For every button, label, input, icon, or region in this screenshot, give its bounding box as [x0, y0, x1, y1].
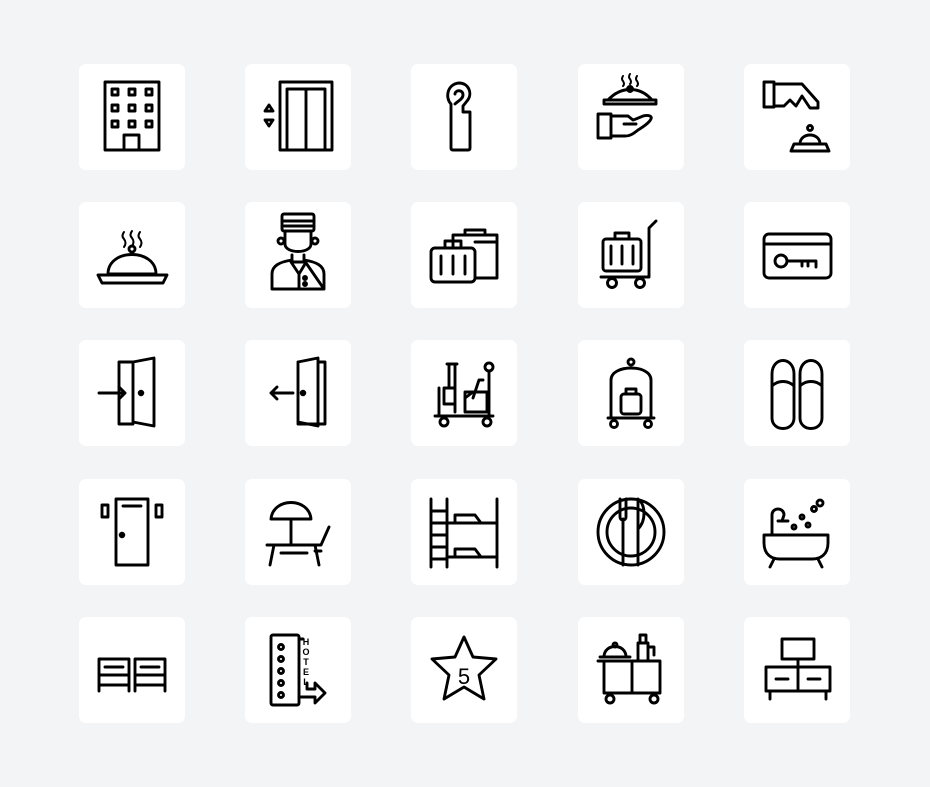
hotel sign text: T [303, 657, 309, 667]
hotel sign text: H [303, 637, 309, 647]
icon tile: hotel room door [79, 479, 185, 585]
icon tile: key card [744, 202, 850, 308]
icon tile: check-out door [245, 340, 351, 446]
icon tile: bellboy [245, 202, 351, 308]
icon tile: luggage [411, 202, 517, 308]
icon tile: elevator [245, 64, 351, 170]
icon tile: luggage trolley [578, 202, 684, 308]
icon tile: service trolley [578, 617, 684, 723]
icon tile: cleaning cart [411, 340, 517, 446]
icon tile: hotel building [79, 64, 185, 170]
icon tile: plate fork knife [578, 479, 684, 585]
icon tile: hotel sign [245, 617, 351, 723]
hotel sign text: E [303, 667, 309, 677]
star icon tile [411, 617, 517, 723]
hotel sign text: O [302, 647, 310, 657]
icon tile: luggage cart [578, 340, 684, 446]
icon tile: slippers [744, 340, 850, 446]
icon tile: food cloche [79, 202, 185, 308]
icon tile: check-in door [79, 340, 185, 446]
star number 5: 5 [458, 664, 470, 689]
icon tile: TV stand [744, 617, 850, 723]
icon tile: door hanger [411, 64, 517, 170]
icon tile: twin beds [79, 617, 185, 723]
hotel sign text: L [303, 677, 309, 687]
icon tile: room service hand [578, 64, 684, 170]
icon tile: beach umbrella chair [245, 479, 351, 585]
icon tile: bathtub [744, 479, 850, 585]
icon tile: bunk bed [411, 479, 517, 585]
icon tile: reception bell [744, 64, 850, 170]
